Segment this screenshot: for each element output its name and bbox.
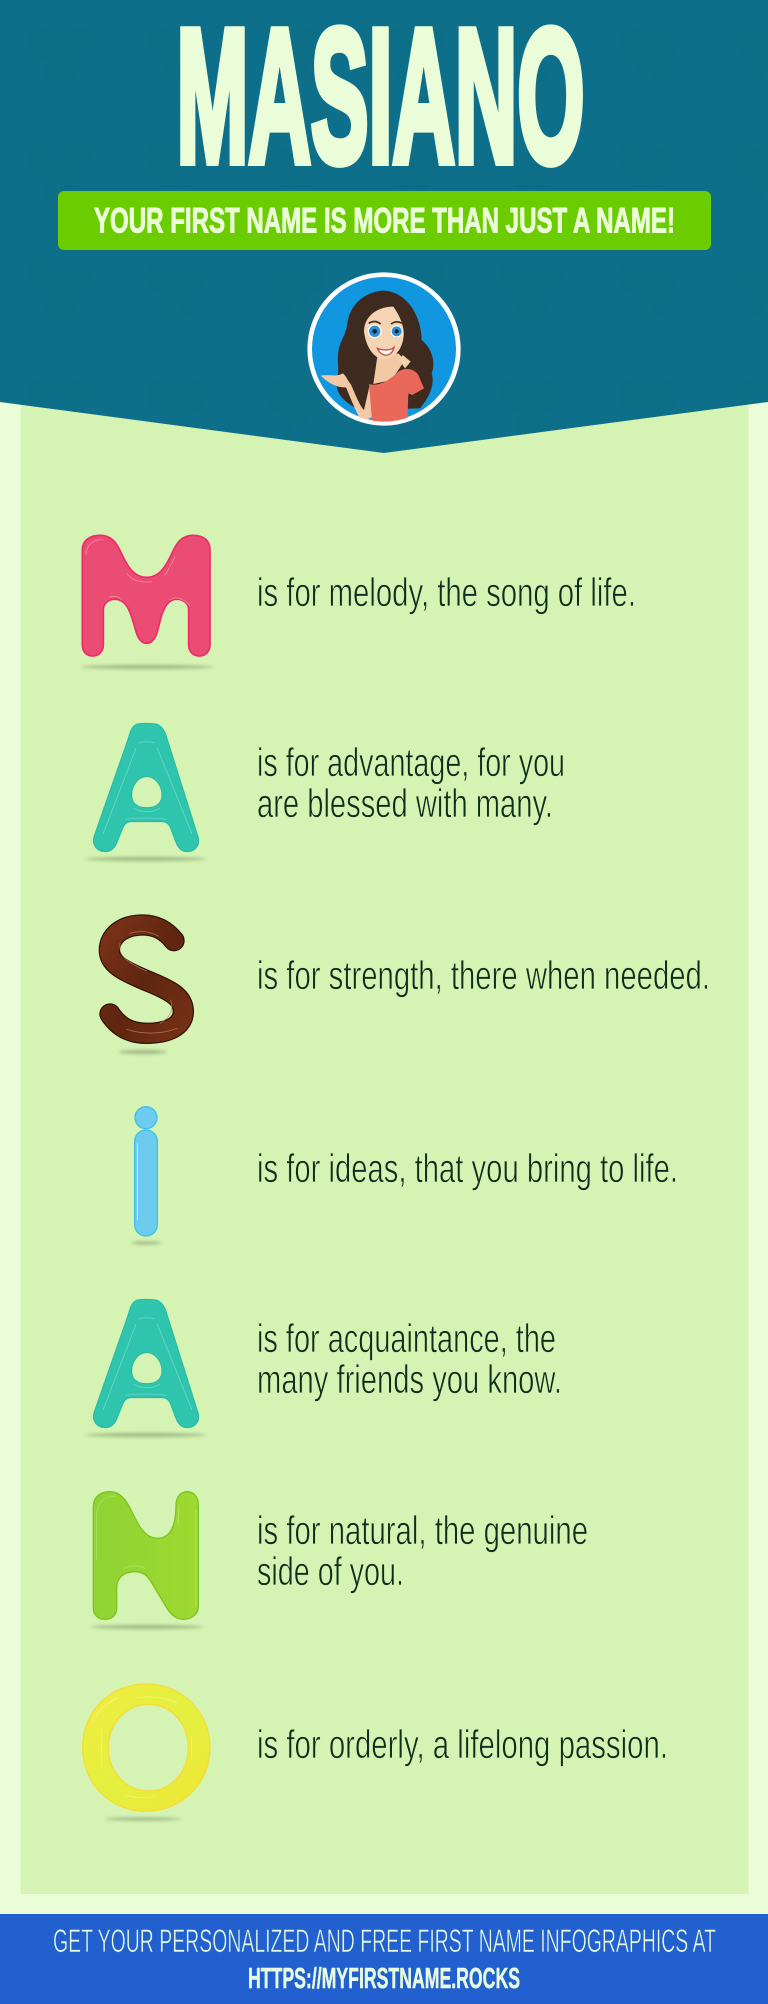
text: N lines: is for natural, the genuine [257, 1509, 588, 1553]
shadow: S [119, 1050, 167, 1054]
icon: letter M [82, 535, 210, 656]
letter row 4: I [131, 1107, 678, 1245]
shadow: N [91, 1625, 203, 1629]
icon: avatar woman in circle [310, 275, 458, 423]
panel: footer [0, 1914, 768, 2004]
shadow: M [81, 665, 213, 669]
icon: letter N [93, 1492, 198, 1619]
letter row 5: A: many friends you know. [257, 1358, 562, 1402]
icon: letter O [83, 1684, 210, 1811]
footer url: HTTPS://MYFIRSTNAME.ROCKS [248, 1963, 520, 1995]
panel: green banner [58, 191, 711, 250]
icon: letter i [135, 1107, 157, 1236]
panel: letters background [20, 380, 748, 1894]
text: A lines: is for advantage, for you [257, 741, 565, 785]
shadow: O [105, 1817, 181, 1821]
letter row 6: N [91, 1492, 588, 1629]
text: A second lines: is for acquaintance, the [257, 1317, 556, 1361]
letter row 1: M [81, 535, 636, 669]
text: M: is for melody, the song of life. [257, 571, 636, 615]
letter row 2: A: are blessed with many. [257, 782, 553, 826]
icon: letter S [109, 925, 183, 1033]
letter row 7: O [83, 1684, 668, 1821]
letter row 6: N: side of you. [257, 1550, 404, 1594]
shadow: I [131, 1241, 161, 1245]
letter row 3: S [109, 925, 710, 1054]
shadow: A [86, 857, 206, 861]
icon: letter A second [93, 1299, 199, 1428]
panel: header chevron [0, 0, 768, 453]
letter row 5: A [86, 1299, 562, 1437]
shadow: A second [86, 1433, 206, 1437]
icon: letter A [93, 723, 199, 852]
letter row 2: A [86, 723, 565, 861]
